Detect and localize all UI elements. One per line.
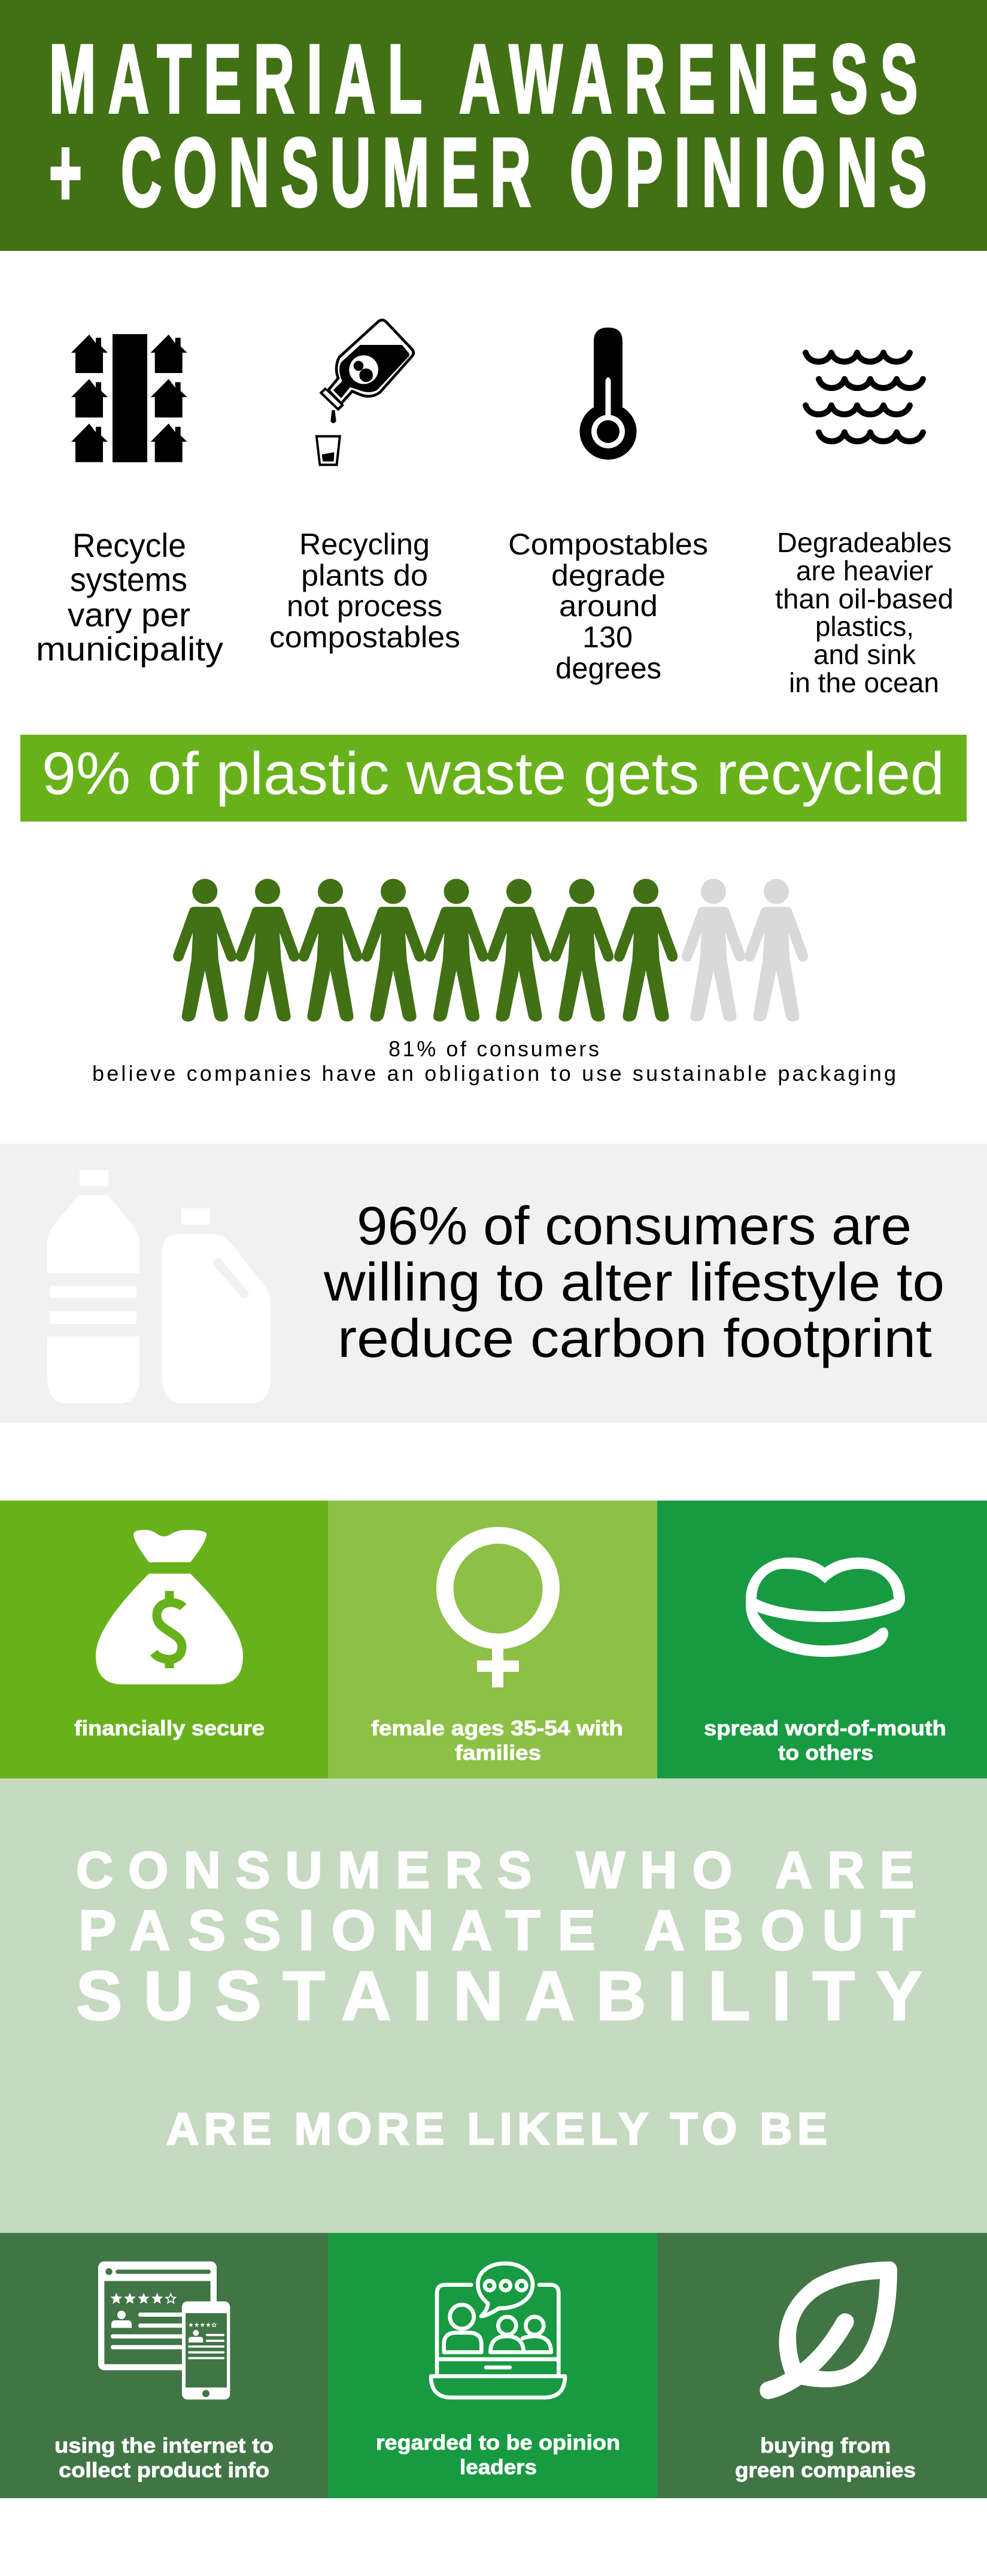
- fact: degradeables sink in the ocean: [775, 353, 953, 698]
- text: 96% statement: willing to alter lifestyle to: [323, 1253, 945, 1313]
- label: families: [455, 1741, 541, 1765]
- banner: 9% recycled: 9% of plastic waste gets recycled: [42, 740, 945, 807]
- fact: recycle systems vary per municipality: [36, 334, 223, 668]
- text: recycle systems: [36, 526, 223, 668]
- text: 96% statement: [323, 1196, 945, 1369]
- text: degradeables: than oil-based: [775, 583, 953, 614]
- heading: CONSUMERS WHO ARE: [76, 1842, 914, 1899]
- label: leaders: [460, 2456, 537, 2479]
- label: [704, 1717, 946, 1765]
- label: [735, 2434, 916, 2482]
- label: using the internet to: [54, 2434, 274, 2457]
- panel: green companies: [657, 2233, 987, 2498]
- text: compostables: around: [559, 589, 658, 623]
- icon: lips: [746, 1557, 905, 1657]
- label: regarded to be opinion: [376, 2431, 620, 2454]
- icon: thermometer: [579, 328, 637, 460]
- text: recycle systems: municipality: [36, 630, 223, 668]
- title banner: [0, 0, 987, 251]
- label: green companies: [735, 2459, 916, 2482]
- fact: compostables degrade around 130 degrees: [508, 328, 708, 685]
- panel: female ages 35-54: [328, 1501, 657, 1778]
- text: compostables: [508, 528, 708, 685]
- panel: financially secure: [0, 1501, 328, 1778]
- panel: spread word-of-mouth: [657, 1501, 987, 1778]
- text: 96% statement: 96% of consumers are: [357, 1196, 912, 1256]
- icon: leaf: [760, 2262, 897, 2399]
- label: [376, 2431, 620, 2479]
- text: compostables: 130: [582, 620, 633, 654]
- text: recycle systems: vary per: [68, 596, 190, 634]
- text: compostables: degrees: [555, 651, 661, 685]
- icon: female symbol: [436, 1527, 560, 1687]
- title text: [49, 25, 927, 227]
- text: recycling plants: Recycling: [299, 528, 430, 561]
- caption: 81% of consumers: believe companies have an obligation to use sustainable packaging: [92, 1061, 896, 1086]
- label: financially secure: [74, 1717, 265, 1740]
- text: degradeables: [775, 527, 953, 698]
- title text: MATERIAL AWARENESS: [49, 25, 918, 134]
- text: compostables: degrade: [551, 559, 666, 592]
- label: [54, 2434, 274, 2482]
- icon: bottle pouring into glass: [315, 320, 414, 466]
- icon: laptop video meeting: [431, 2263, 565, 2398]
- label: to others: [778, 1741, 873, 1765]
- panel: opinion leaders: [328, 2233, 657, 2498]
- icon: houses along a road: [71, 334, 187, 462]
- text: compostables: Compostables: [508, 528, 708, 561]
- text: recycling plants: compostables: [269, 620, 460, 654]
- icon: money bag: [96, 1530, 243, 1684]
- panel: using the internet: [0, 2233, 328, 2498]
- panel: 96% of consumers: [0, 1144, 987, 1423]
- text: recycling plants: [269, 528, 460, 654]
- text: recycling plants: not process: [287, 589, 442, 623]
- pictogram: 8 of 10 people: [173, 879, 808, 1022]
- icon: ocean waves: [806, 353, 923, 441]
- label: [371, 1717, 623, 1765]
- text: recycling plants: plants do: [301, 559, 428, 592]
- text: recycle systems: systems: [70, 560, 187, 598]
- label: spread word-of-mouth: [704, 1717, 946, 1740]
- text: recycle systems: Recycle: [72, 526, 186, 564]
- subheading: ARE MORE LIKELY TO BE: [166, 2104, 827, 2154]
- text: degradeables: are heavier: [796, 555, 933, 586]
- text: 96% statement: reduce carbon footprint: [338, 1309, 932, 1369]
- text: degradeables: Degradeables: [777, 527, 952, 558]
- text: degradeables: and sink: [813, 639, 916, 670]
- label: collect product info: [59, 2459, 269, 2482]
- heading: [76, 1842, 922, 2035]
- text: degradeables: in the ocean: [789, 667, 939, 698]
- caption: 81% of consumers: [92, 1037, 896, 1086]
- label: female ages 35-54 with: [371, 1717, 623, 1740]
- title text: + CONSUMER OPINIONS: [49, 119, 927, 227]
- panel: consumers passionate about sustainability: [0, 1778, 987, 2233]
- heading: PASSIONATE ABOUT: [78, 1899, 915, 1962]
- icon: tablet and phone with reviews: [98, 2262, 230, 2399]
- fact: recycling plants do not process compostables: [269, 320, 460, 654]
- text: degradeables: plastics,: [815, 611, 914, 642]
- heading: SUSTAINABILITY: [76, 1957, 922, 2035]
- label: buying from: [760, 2434, 891, 2457]
- icon: plastic bottles: [47, 1170, 271, 1404]
- caption: 81% of consumers: 81% of consumers: [388, 1037, 599, 1061]
